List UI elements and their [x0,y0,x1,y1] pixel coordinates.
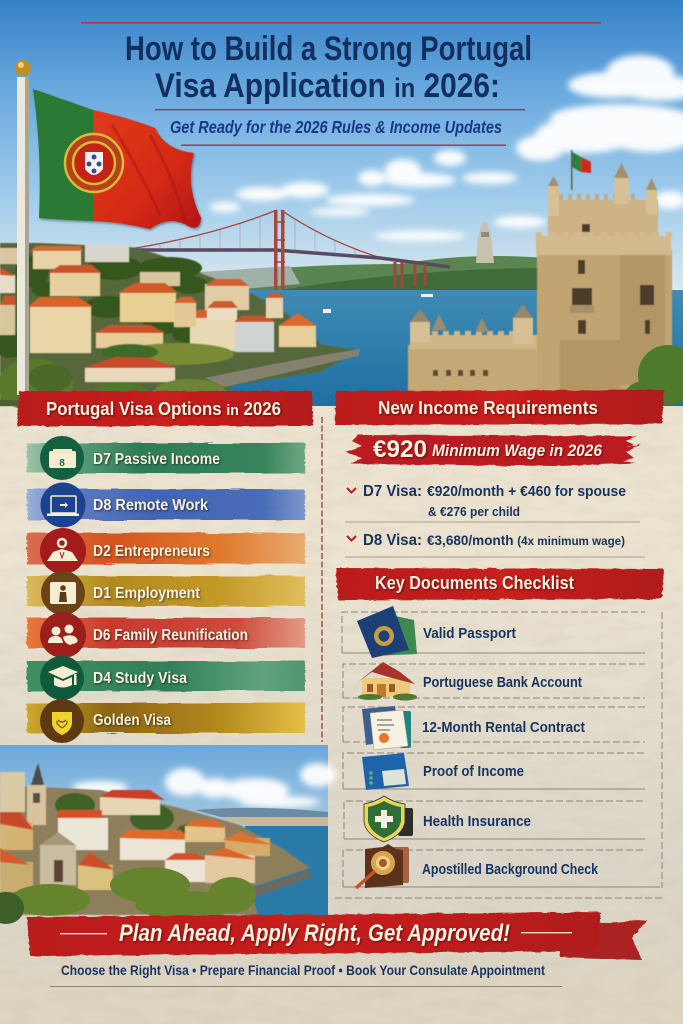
option: Golden Visa [27,699,305,743]
coat of arms [65,134,123,192]
promenade [205,349,360,387]
panel: documents checklist [335,568,665,898]
callout: minimum wage [345,435,642,466]
item: proof of income: Proof of Income [423,764,524,780]
rule mid [155,109,525,110]
bastion [408,304,573,395]
item: background check [343,844,660,888]
distant monument [476,222,494,263]
flag of Portugal [33,89,201,229]
text: D7 requirement: €920/month + €460 for spouse [427,483,626,500]
bridge [130,210,450,290]
item: bank account: Portuguese Bank Account [423,675,582,691]
text: D7 requirement [347,483,626,519]
title [125,30,532,105]
panel: income requirements [335,390,664,558]
far hills [200,256,545,292]
foreground tree [625,345,683,409]
item: bank account [343,662,645,700]
item: proof of income [343,753,645,790]
distant shore [195,808,328,822]
dark trees [0,256,208,358]
town [0,763,310,915]
title block [81,22,601,146]
callout: minimum wage: €920 [373,436,427,463]
flagpole [15,60,31,395]
sky with clouds [0,0,683,300]
text: D7 requirement: & €276 per child [428,504,520,519]
option: D7 Passive Income: D7 Passive Income [93,451,220,468]
option: D2 Entrepreneurs [27,528,305,574]
item: rental contract: 12-Month Rental Contract [422,720,585,736]
heading banner: visa options: Portugal Visa Options in 2026 [46,399,281,419]
Belem tower [408,150,672,395]
option: D4 Study Visa [27,656,305,700]
title: How to Build a Strong Portugal [125,30,532,68]
main tower [536,163,672,392]
option: D1 Employment [27,571,305,615]
option: D6 Family Reunification [27,612,305,658]
item: background check: Apostilled Background Check [422,862,599,878]
heading banner: income requirements: New Income Requirements [378,398,598,418]
clouds [72,763,336,808]
callout: minimum wage: Minimum Wage in 2026 [432,442,603,460]
small flag [571,150,591,190]
boats [323,294,433,313]
hero photo: Lisbon skyline [0,0,683,411]
water [245,826,328,916]
text: D8 requirement: €3,680/month (4x minimum wage) [427,532,625,548]
river [220,290,683,406]
footer banner [27,912,647,960]
option: D6 Family Reunification: D6 Family Reunification [93,627,248,644]
rule top [81,22,601,24]
hillside town [0,243,360,411]
option: D8 Remote Work [27,482,305,528]
item: passport [342,606,645,658]
option: D4 Study Visa: D4 Study Visa [93,670,187,687]
footer banner: Plan Ahead, Apply Right, Get Approved! [119,920,510,947]
rule lower [181,144,506,146]
option: D1 Employment: D1 Employment [93,585,200,602]
item: health insurance: Health Insurance [423,814,531,830]
option: Golden Visa: Golden Visa [93,712,171,729]
panel: visa options [17,391,313,743]
heading banner: documents: Key Documents Checklist [375,573,574,593]
item: health insurance [344,796,645,842]
option: D8 Remote Work: D8 Remote Work [93,497,208,514]
item: rental contract [343,706,645,750]
footer tagline: Choose the Right Visa • Prepare Financial Proof • Book Your Consulate Appointment [61,963,545,978]
text: D7 requirement: D7 Visa: [363,483,422,500]
lower photo: coastal town [0,745,336,924]
text: D8 requirement: D8 Visa: [363,532,422,549]
shrubs [10,867,256,919]
heading banner: income requirements [335,390,664,425]
heading banner: documents [336,568,664,600]
option: D7 Passive Income [27,436,305,480]
title: Visa Application in 2026: [155,67,500,105]
subtitle: Get Ready for the 2026 Rules & Income Updates [170,117,502,137]
heading banner: visa options [17,391,313,426]
option: D2 Entrepreneurs: D2 Entrepreneurs [93,543,210,560]
item: passport: Valid Passport [423,626,516,642]
text: D8 requirement [347,532,625,549]
option: D7 Passive Income: 8 [59,458,65,469]
